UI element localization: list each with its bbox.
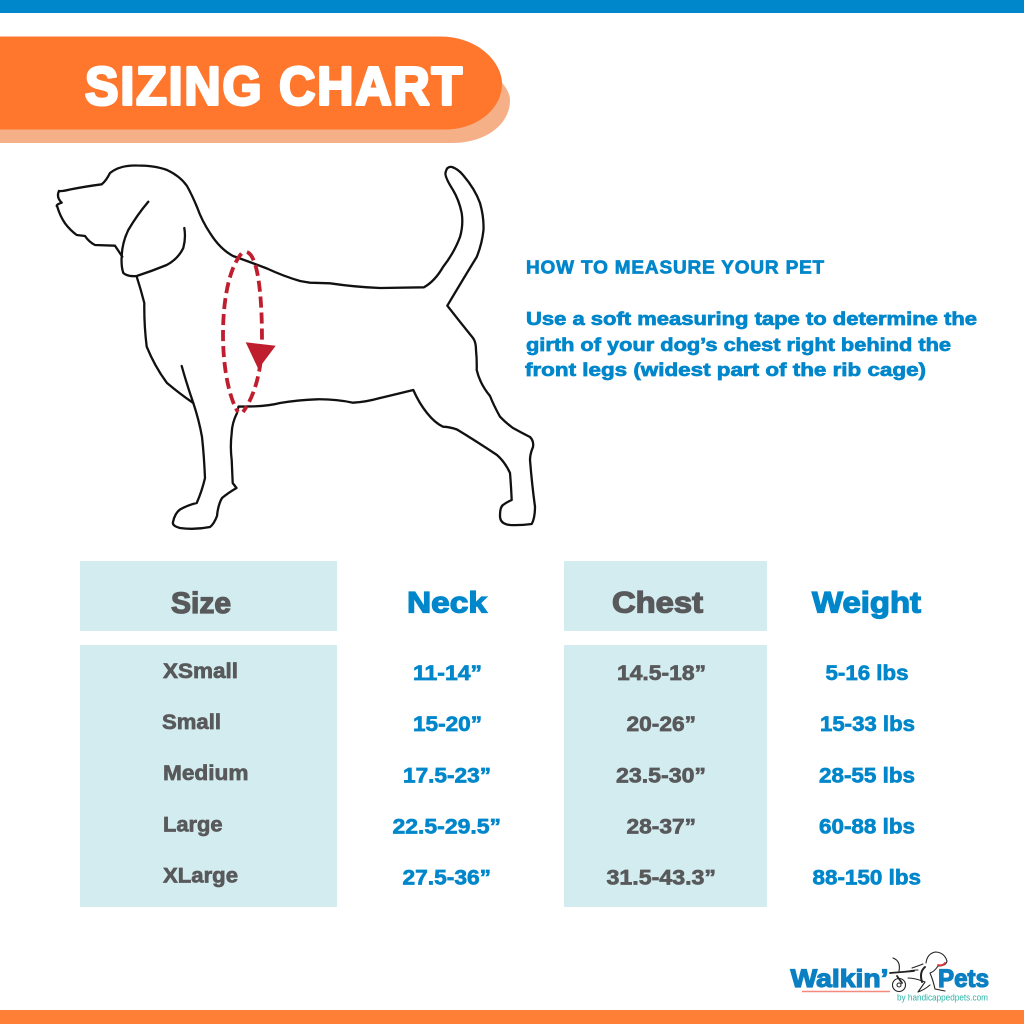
size labels: XSmall bbox=[163, 659, 238, 683]
logo red underline bbox=[802, 990, 890, 992]
logo dog in wheelchair bbox=[890, 952, 947, 992]
table column: size bbox=[80, 561, 337, 907]
table column: weight bbox=[812, 586, 921, 890]
logo wordmark right: Pets bbox=[938, 965, 989, 993]
size labels: Small bbox=[162, 710, 221, 734]
weight values: 60-88 lbs bbox=[819, 814, 915, 838]
instructions: Use a soft measuring tape to determine the bbox=[526, 309, 977, 329]
instructions: girth of your dog’s chest right behind the bbox=[526, 335, 951, 355]
size labels: Large bbox=[163, 812, 223, 836]
dog outline bbox=[57, 165, 535, 529]
bottom bar bbox=[0, 1010, 1024, 1024]
weight values: 28-55 lbs bbox=[819, 764, 915, 788]
neck values bbox=[392, 661, 501, 890]
title: SIZING CHART bbox=[85, 56, 464, 116]
table column: chest bbox=[564, 561, 767, 907]
chest values: 23.5-30” bbox=[616, 764, 706, 788]
instructions bbox=[525, 309, 977, 380]
chest values bbox=[606, 661, 716, 890]
logo tagline: by handicappedpets.com bbox=[897, 992, 988, 1002]
logo bbox=[790, 952, 989, 1002]
weight values: 15-33 lbs bbox=[820, 712, 915, 736]
chest values: 20-26” bbox=[626, 712, 696, 736]
top bar bbox=[0, 0, 1024, 13]
neck header: Neck bbox=[407, 586, 487, 620]
neck values: 15-20” bbox=[413, 712, 482, 736]
size labels bbox=[162, 659, 248, 888]
chest header: Chest bbox=[612, 586, 703, 620]
measuring tape arrowhead bbox=[246, 342, 276, 369]
chest values: 28-37” bbox=[626, 814, 696, 838]
heading: HOW TO MEASURE YOUR PET bbox=[526, 256, 825, 278]
neck values: 22.5-29.5” bbox=[392, 814, 501, 838]
how to measure text bbox=[525, 256, 977, 380]
logo wordmark left: Walkin’ bbox=[790, 965, 888, 993]
banner shadow bbox=[0, 60, 510, 143]
dog illustration bbox=[57, 165, 535, 529]
neck values: 11-14” bbox=[413, 661, 482, 685]
weight header: Weight bbox=[812, 586, 921, 620]
chest values: 31.5-43.3” bbox=[606, 866, 716, 890]
title banner bbox=[0, 36, 510, 143]
instructions: front legs (widest part of the rib cage) bbox=[525, 360, 926, 380]
weight values bbox=[812, 661, 921, 890]
size header: Size bbox=[171, 587, 231, 620]
size header cell bbox=[80, 561, 337, 631]
weight values: 88-150 lbs bbox=[812, 866, 921, 890]
table column: neck bbox=[392, 586, 501, 890]
size body cell bbox=[80, 645, 337, 907]
chest header cell bbox=[564, 561, 767, 631]
measuring tape loop bbox=[223, 252, 262, 412]
chest values: 14.5-18” bbox=[617, 661, 706, 685]
chest body cell bbox=[564, 645, 767, 907]
size labels: Medium bbox=[163, 761, 248, 785]
neck values: 17.5-23” bbox=[403, 764, 491, 788]
weight values: 5-16 lbs bbox=[826, 661, 909, 685]
neck values: 27.5-36” bbox=[402, 866, 491, 890]
size labels: XLarge bbox=[163, 864, 238, 888]
banner body bbox=[0, 36, 502, 130]
